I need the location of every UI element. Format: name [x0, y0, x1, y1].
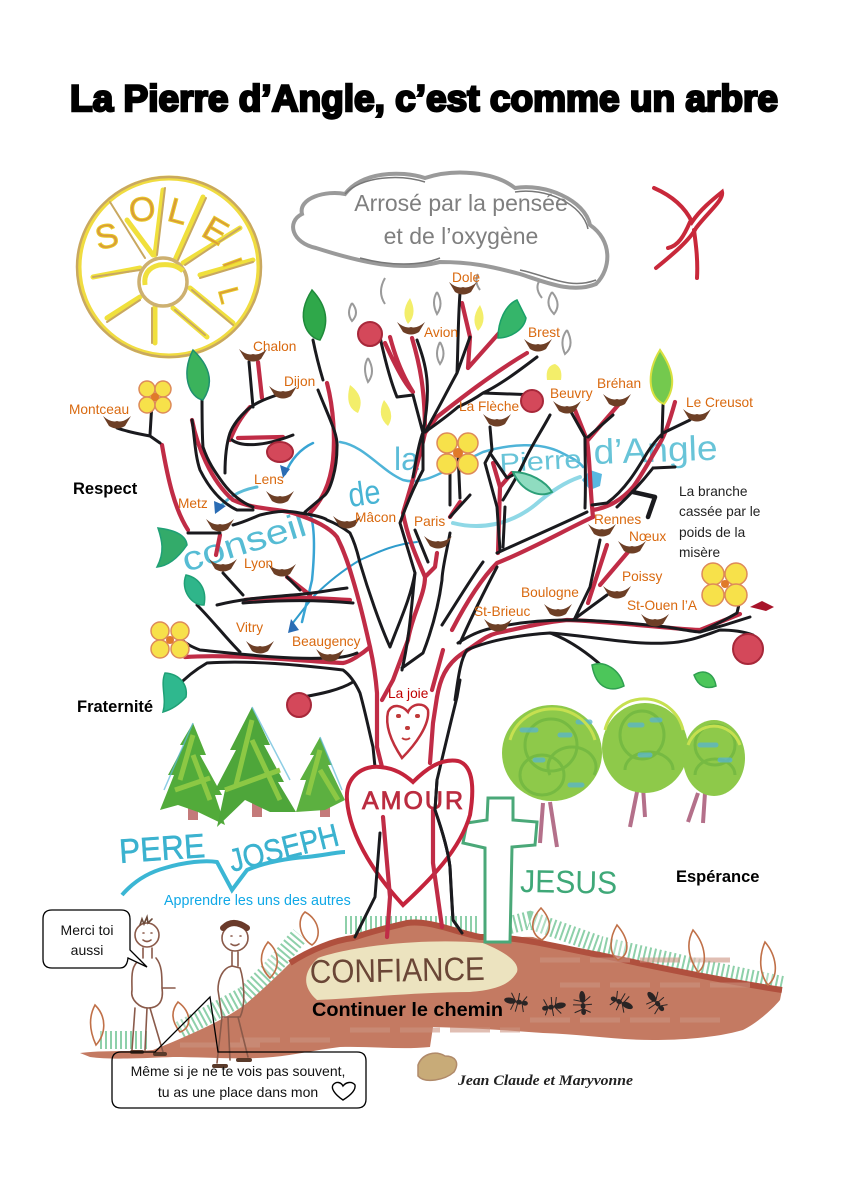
rain drops [349, 274, 571, 382]
confiance patch [306, 941, 517, 1000]
handwritten: confiance: CONFIANCE [309, 950, 485, 990]
speech bubble: merci: aussi [71, 942, 103, 958]
stone [418, 1053, 457, 1080]
nests [103, 282, 711, 662]
flowers [139, 381, 747, 658]
handwritten: conseil de: conseil [177, 506, 311, 580]
label: Fraternité: Fraternité [77, 698, 153, 716]
label: Respect: Respect [73, 480, 138, 498]
speech bubble: meme si: tu as une place dans mon [158, 1084, 318, 1100]
icon: red bird [654, 188, 722, 278]
speech bubble: merci [43, 910, 147, 968]
round trees [502, 699, 745, 847]
text: broken branch note: cassée par le [679, 504, 760, 519]
labels: town names: Vitry [236, 620, 263, 635]
text: continuer le chemin: Continuer le chemin [312, 1000, 503, 1021]
labels: town names: Boulogne [521, 585, 579, 600]
pale yellow leaves [348, 298, 561, 426]
text: broken branch note: La branche [679, 484, 748, 499]
banner: Pere Joseph [118, 817, 345, 895]
red cherries [358, 322, 382, 346]
cross: green [463, 798, 617, 942]
blue handwriting: de [346, 473, 383, 515]
handwritten: la pierre d'angle: la [394, 441, 419, 477]
labels: town names: Beaugency [292, 634, 361, 649]
icon: sun: O [127, 190, 157, 230]
fir trees [160, 707, 345, 827]
la joie face: La joie [388, 686, 428, 701]
speech bubble: merci: Merci toi [61, 922, 113, 938]
labels: town names: Brest [528, 325, 560, 340]
labels: town names: Bréhan [597, 376, 641, 391]
labels: town names: Metz [178, 496, 208, 511]
blue handwriting: d’Angle [593, 429, 718, 472]
labels: town names: Lens [254, 472, 284, 487]
labels: town names: Poissy [622, 569, 662, 584]
labels: town names: Paris [414, 514, 445, 529]
title: La Pierre d’Angle, c’est comme un arbre [70, 78, 778, 119]
icon: ants [502, 986, 670, 1018]
labels: town names: Beuvry [550, 386, 593, 401]
blue handwriting: Pierre [499, 444, 582, 478]
icon: sun: I [216, 253, 248, 271]
label: Espérance: Espérance [676, 868, 759, 886]
heart: amour [347, 761, 472, 937]
leaves and flowers [139, 290, 774, 717]
heart: amour: AMOUR [362, 787, 463, 815]
person: left [132, 917, 175, 1054]
labels: town names: Nœux [629, 529, 666, 544]
ground hill [80, 908, 782, 1080]
cloud [293, 173, 607, 382]
labels: town names: Dole [452, 270, 480, 285]
icon: sun: L [212, 284, 246, 307]
cloud text: et de l’oxygène [384, 223, 538, 249]
banner: Pere Joseph: PERE [118, 827, 206, 871]
icon: sun: E [196, 209, 235, 253]
speech bubble: meme si [112, 997, 366, 1108]
icon: sun [77, 177, 261, 357]
cloud text: Arrosé par la pensée [354, 190, 568, 216]
labels: town names: St-Brieuc [474, 604, 530, 619]
arrow heads [214, 465, 299, 633]
text: broken branch note: misère [679, 545, 720, 560]
labels: town names: Chalon [253, 339, 296, 354]
icon: heart [332, 1082, 355, 1100]
grass [100, 920, 782, 1040]
trunk and branches: black [117, 402, 160, 443]
labels: town names: Avion [424, 325, 458, 340]
labels: town names [69, 270, 753, 649]
labels: town names: Rennes [594, 512, 641, 527]
labels: town names: La Flèche [459, 399, 519, 414]
trunk and branches: red [192, 420, 382, 767]
blue handwriting [177, 429, 718, 633]
speech bubble: meme si: Même si je ne te vois pas souvent, [131, 1063, 345, 1079]
labels: town names: Lyon [244, 556, 273, 571]
signature: Jean Claude et Maryvonne [457, 1073, 633, 1089]
green leaves [303, 290, 326, 340]
labels: town names: Montceau [69, 402, 129, 417]
banner: Pere Joseph: JOSEPH [225, 817, 342, 879]
handwritten: Jesus: JESUS [520, 863, 617, 901]
labels: town names: Dijon [284, 374, 315, 389]
text: apprendre: Apprendre les uns des autres [164, 893, 351, 909]
small leaves [91, 908, 775, 1045]
text: broken branch note: poids de la [679, 525, 746, 540]
person: right [214, 923, 250, 1066]
la joie face [387, 686, 428, 758]
tree [117, 293, 753, 933]
labels: town names: St-Ouen l’A [627, 598, 698, 613]
icon: sun: L [164, 191, 192, 233]
labels: town names: Le Creusot [686, 395, 753, 410]
icon: sun: S [92, 216, 122, 258]
labels: town names: Mâcon [355, 510, 396, 525]
